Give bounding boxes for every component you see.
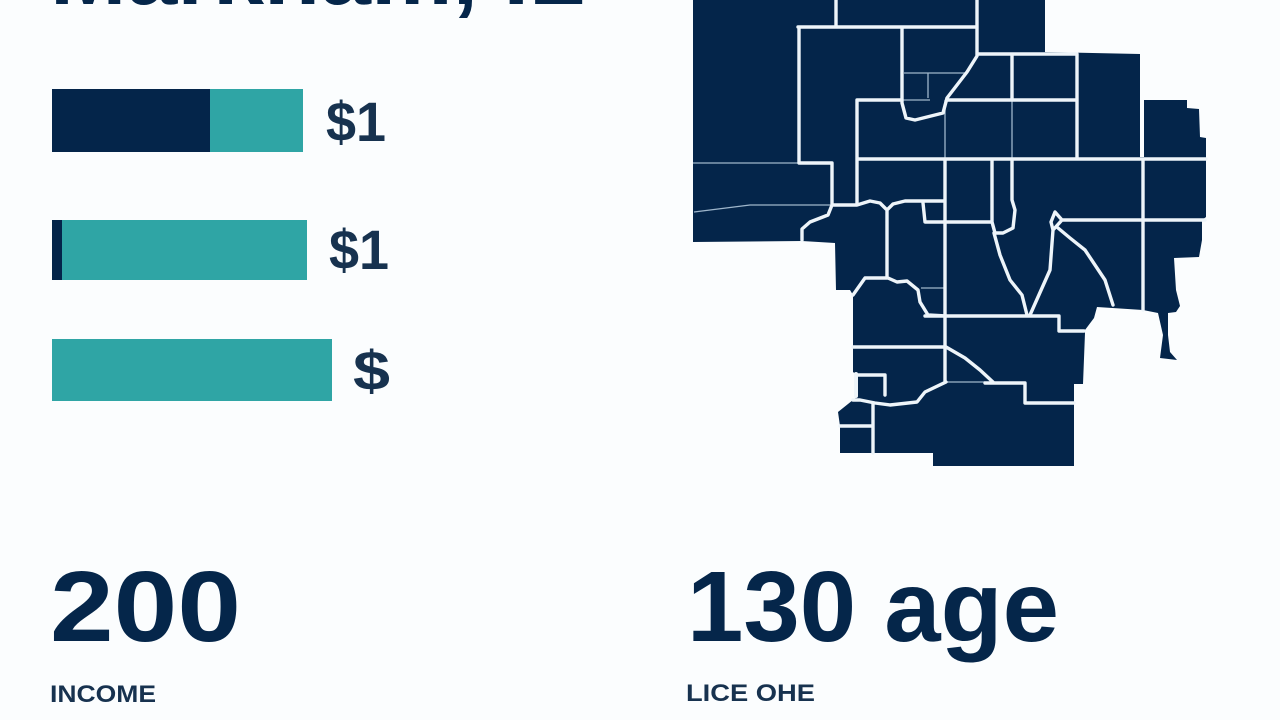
stat: income: INCOME [50,681,156,708]
bar 2: $1 [329,218,389,281]
stat: income [50,551,241,708]
bar 3: $ [353,339,390,402]
bar 1: $1 [326,90,386,153]
bar 2 [52,218,389,281]
bar 3 [52,339,390,402]
stat: income: 200 [50,551,241,663]
stat: age: LICE OHE [686,680,815,707]
map fill [693,0,1206,466]
map boundaries [693,0,1206,453]
map: county silhouette [693,0,1206,466]
bar 1 [52,89,386,153]
bar chart [52,89,390,402]
stat: age: 130 age [687,551,1059,663]
